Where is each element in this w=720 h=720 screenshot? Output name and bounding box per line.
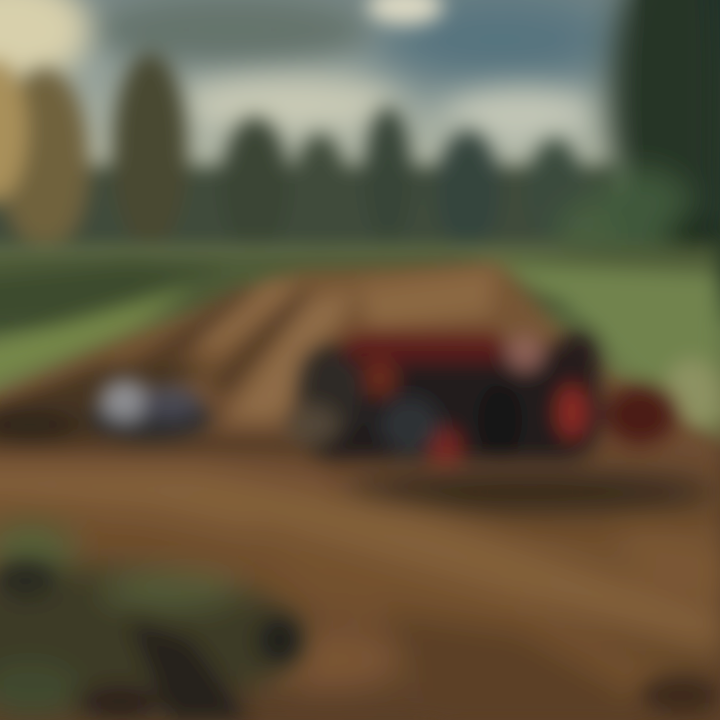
foreground soil ridges bbox=[0, 465, 720, 720]
right foreground trees bbox=[557, 0, 720, 310]
field furrows bbox=[0, 268, 495, 454]
dark soil clod bbox=[640, 675, 720, 715]
tree line bbox=[0, 52, 620, 257]
tractor body bbox=[286, 330, 676, 465]
sky bbox=[0, 0, 640, 280]
tractor shadow bbox=[340, 472, 720, 512]
foreground plants bbox=[0, 522, 302, 720]
soil ground bbox=[0, 264, 720, 720]
green grass bands bbox=[0, 245, 720, 440]
gray machine bbox=[0, 380, 212, 442]
red tractor bbox=[286, 330, 720, 512]
